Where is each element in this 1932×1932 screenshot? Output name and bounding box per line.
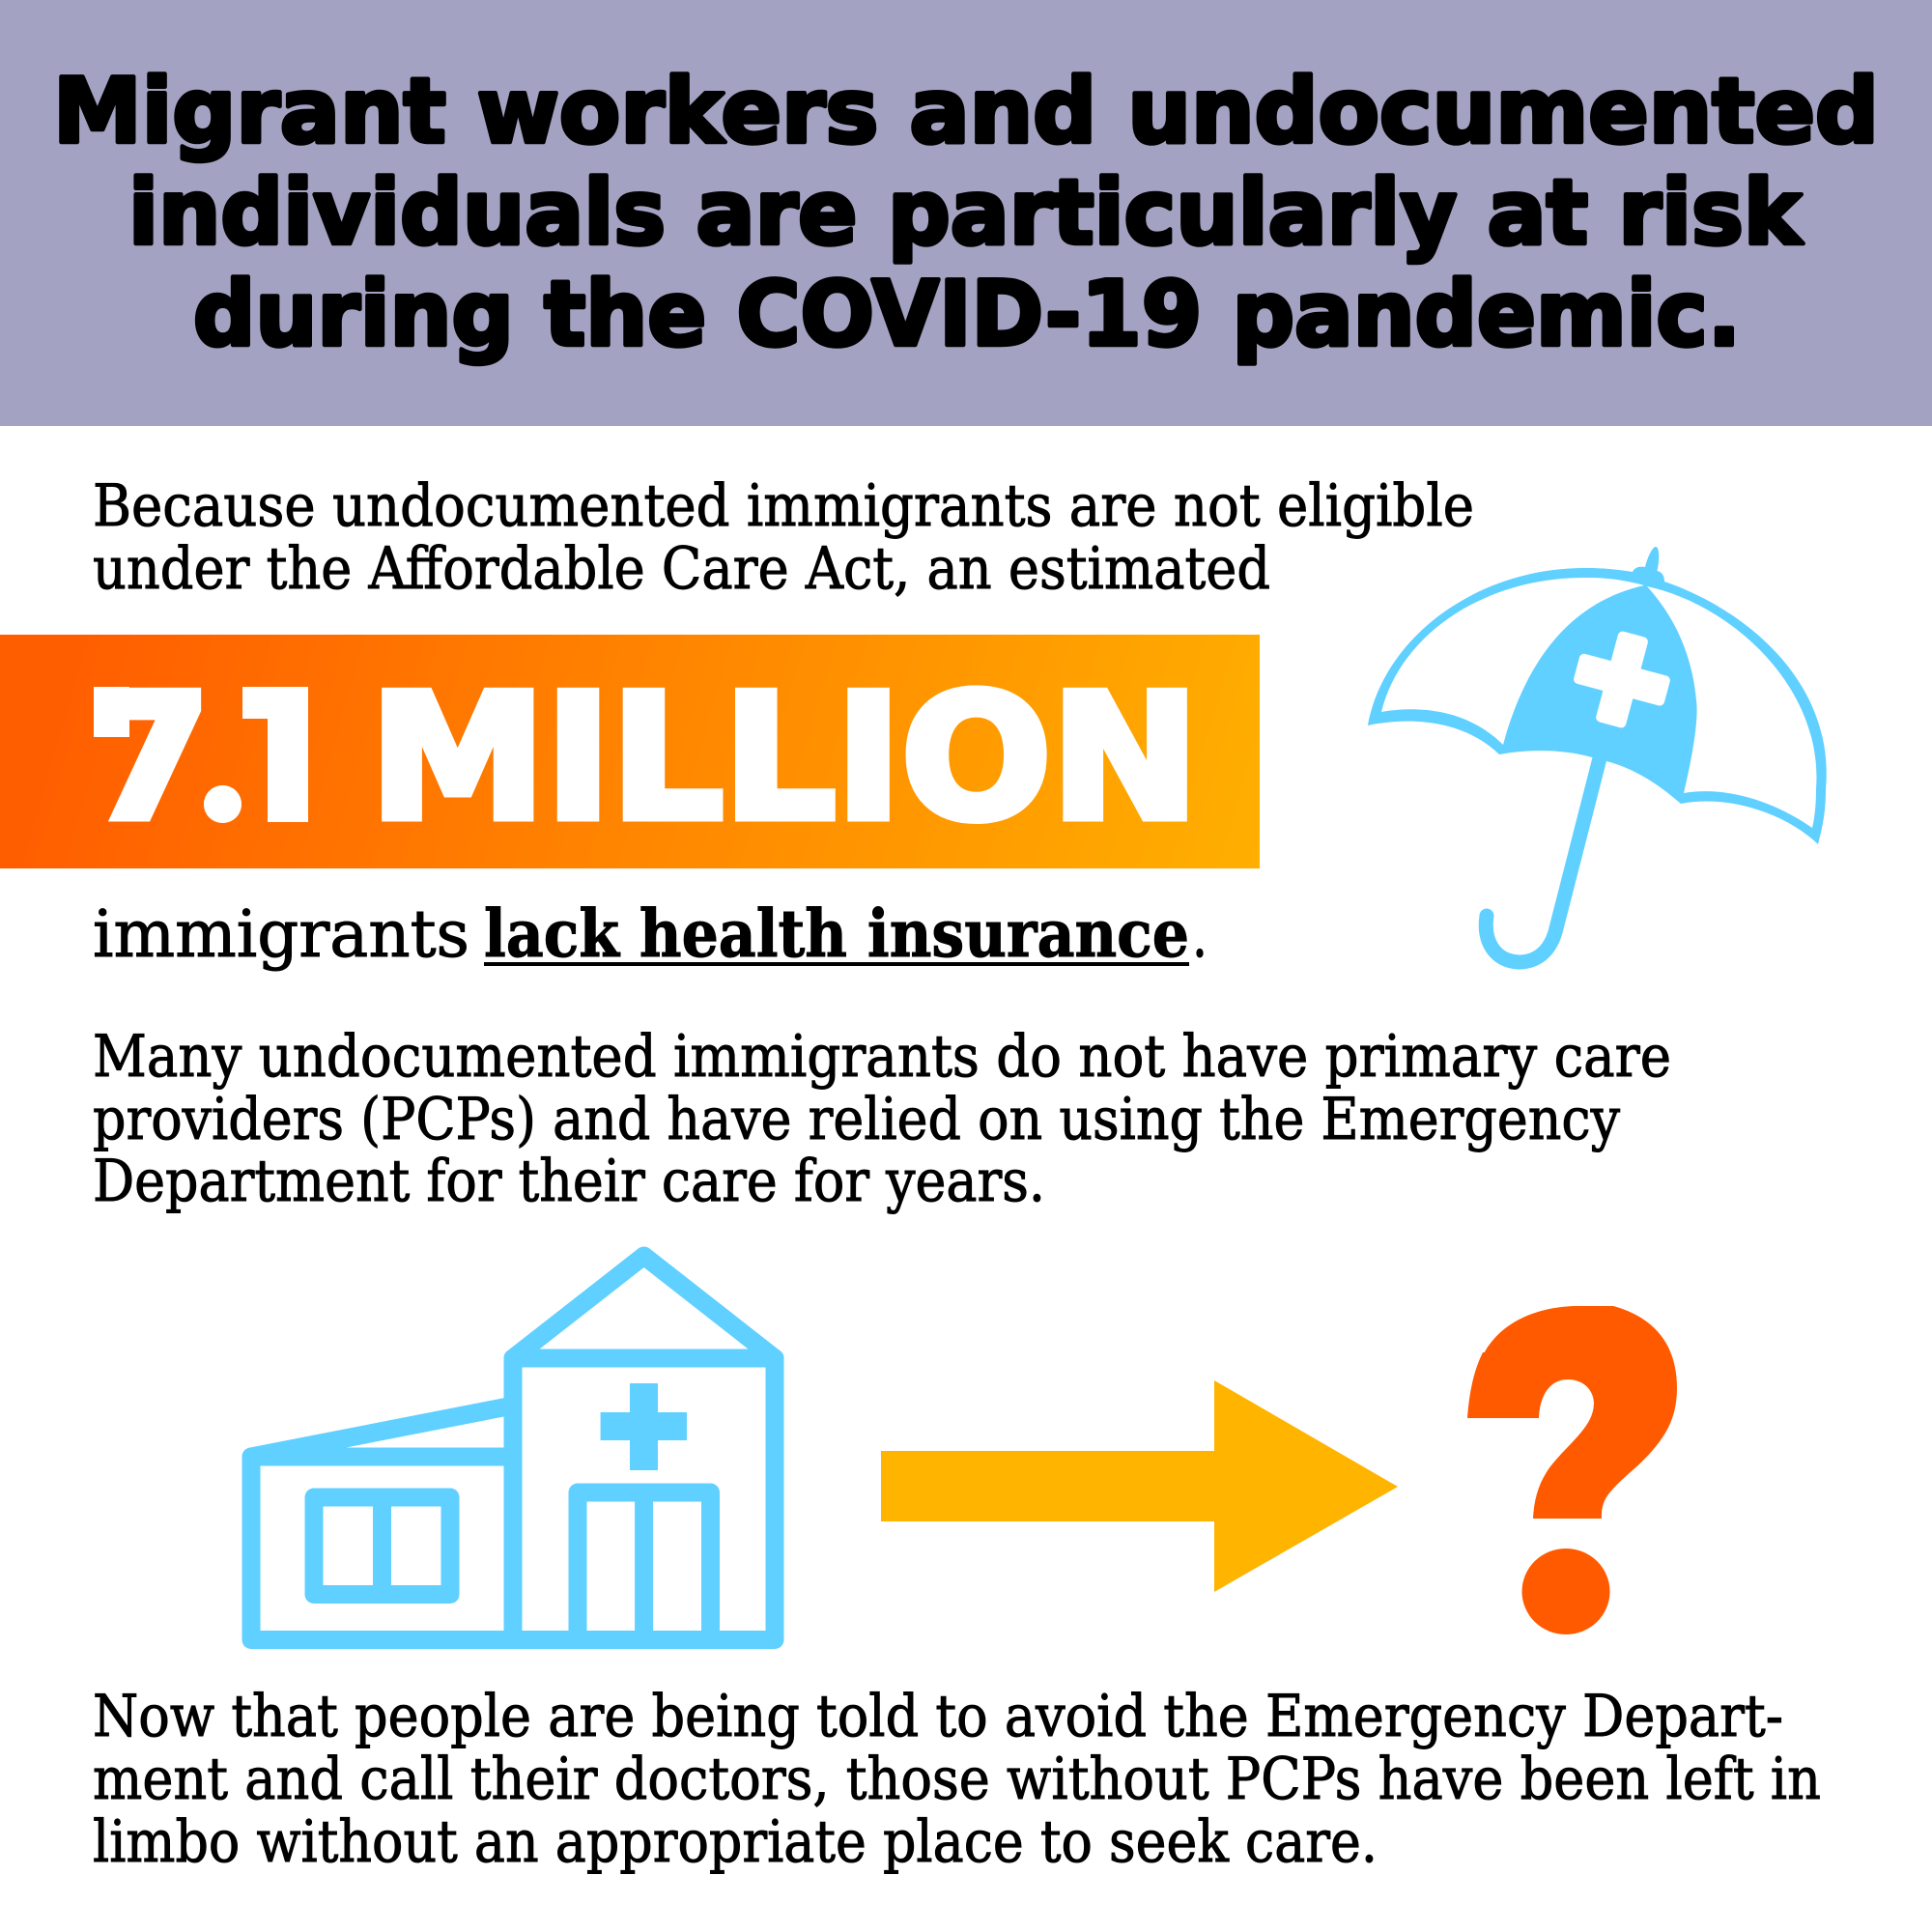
- icon: hospital: [251, 1256, 775, 1640]
- text: lack health insurance: immigrants: [93, 896, 469, 972]
- arrow: [881, 1380, 1398, 1592]
- icon: umbrella with medical cross: [1368, 547, 1827, 962]
- question mark: ?: [1444, 1220, 1703, 1740]
- banner: 7.1 million: [0, 635, 1260, 868]
- intro text: Because undocumented immigrants are not eligible: [93, 472, 1474, 540]
- title: [53, 59, 1879, 366]
- text: primary care providers: Department for their care for years.: [93, 1148, 1045, 1215]
- text: lack health insurance: [93, 895, 1208, 972]
- closing text: Now that people are being told to avoid the Emergency Depart-: [93, 1683, 1783, 1750]
- banner: 7.1 million: .: [189, 662, 255, 862]
- banner: 7.1 million: 1: [225, 658, 345, 858]
- title: individuals are particularly at risk: [128, 160, 1804, 265]
- text: primary care providers: providers (PCPs) and have relied on using the Emergency: [93, 1086, 1620, 1153]
- title: during the COVID-19 pandemic.: [193, 262, 1741, 366]
- text: primary care providers: [93, 1023, 1671, 1215]
- closing text: [93, 1683, 1821, 1876]
- banner: 7.1 million: MILLION: [370, 658, 1199, 858]
- title: Migrant workers and undocumented: [53, 59, 1879, 163]
- intro text: under the Affordable Care Act, an estimated: [93, 535, 1270, 603]
- closing text: limbo without an appropriate place to seek care.: [93, 1808, 1378, 1876]
- text: primary care providers: Many undocumented immigrants do not have primary care: [93, 1023, 1671, 1091]
- text: lack health insurance: lack health insurance: [484, 895, 1189, 972]
- banner: 7.1 million: 7: [89, 658, 211, 858]
- question mark: [1467, 1306, 1677, 1634]
- header panel: [0, 0, 1932, 426]
- text: lack health insurance: .: [1192, 896, 1208, 972]
- intro text: [93, 472, 1474, 603]
